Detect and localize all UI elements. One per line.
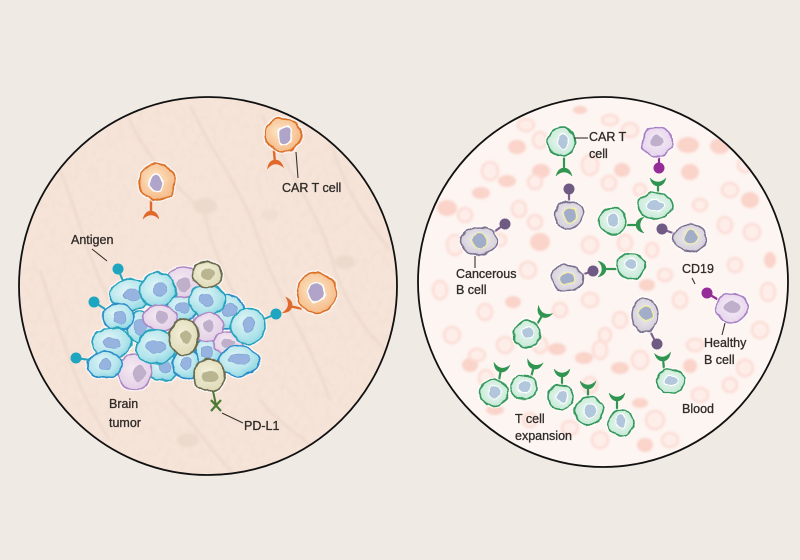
label: Brain tumor: tumor xyxy=(109,416,141,430)
cancerous B cell: right of center xyxy=(656,224,706,252)
antigens on tumor xyxy=(70,264,282,364)
cancerous B cell with CD19: below top CAR T xyxy=(555,184,583,229)
label: PD-L1: PD-L1 xyxy=(244,419,279,433)
label: CAR T cell (blood): CAR T xyxy=(589,130,627,144)
healthy B cell with CD19: top right xyxy=(642,127,672,174)
CAR T cell: upper middle of brain panel xyxy=(139,164,175,219)
activated T cell: upper right xyxy=(638,178,672,219)
label: CD19 xyxy=(682,262,714,284)
label: T cell expansion: expansion xyxy=(515,429,572,443)
label: Antigen: Antigen xyxy=(71,233,113,247)
label: Healthy B cell: B cell xyxy=(704,353,735,367)
CAR T cell with receptor: top of blood panel xyxy=(548,128,576,176)
label: T cell expansion: T cell xyxy=(515,412,545,426)
label: Healthy B cell xyxy=(704,323,747,367)
label: Healthy B cell: Healthy xyxy=(704,336,747,350)
label: Blood: Blood xyxy=(682,402,714,416)
red blood cells xyxy=(433,106,776,460)
T cell expansion group xyxy=(480,306,634,436)
label: CAR T cell (brain): CAR T cell xyxy=(282,181,341,195)
CAR T cell: binding tumor antigen xyxy=(282,273,337,317)
label: Cancerous B cell xyxy=(456,256,516,297)
T cell: lower right xyxy=(655,352,685,393)
label: Cancerous B cell: Cancerous xyxy=(456,267,516,281)
label: CD19: CD19 xyxy=(682,262,714,276)
activated T cell: binding lower center xyxy=(598,253,645,279)
label: CAR T cell (blood): cell xyxy=(589,147,608,161)
CAR T cell: top right of brain panel xyxy=(265,118,301,169)
label: Cancerous B cell: B cell xyxy=(456,283,487,297)
PD-L1 marker xyxy=(211,391,221,411)
healthy B cell: right xyxy=(702,288,748,323)
label: PD-L1 xyxy=(222,413,279,433)
cancerous B cell: lower right xyxy=(632,298,662,350)
brain tissue texture xyxy=(40,108,389,472)
activated T cell: center xyxy=(599,208,644,234)
tumor cell cluster xyxy=(70,261,282,411)
label: CAR T cell (blood) xyxy=(574,130,627,161)
label: CAR T cell (brain) xyxy=(282,152,341,195)
panel: blood circle xyxy=(418,97,788,467)
cancerous B cell: lower center xyxy=(551,265,598,291)
panel: brain tissue circle xyxy=(19,97,397,475)
cancerous B cell: left xyxy=(461,218,510,255)
label: Brain tumor: Brain xyxy=(109,397,138,411)
label: Antigen xyxy=(71,233,113,261)
